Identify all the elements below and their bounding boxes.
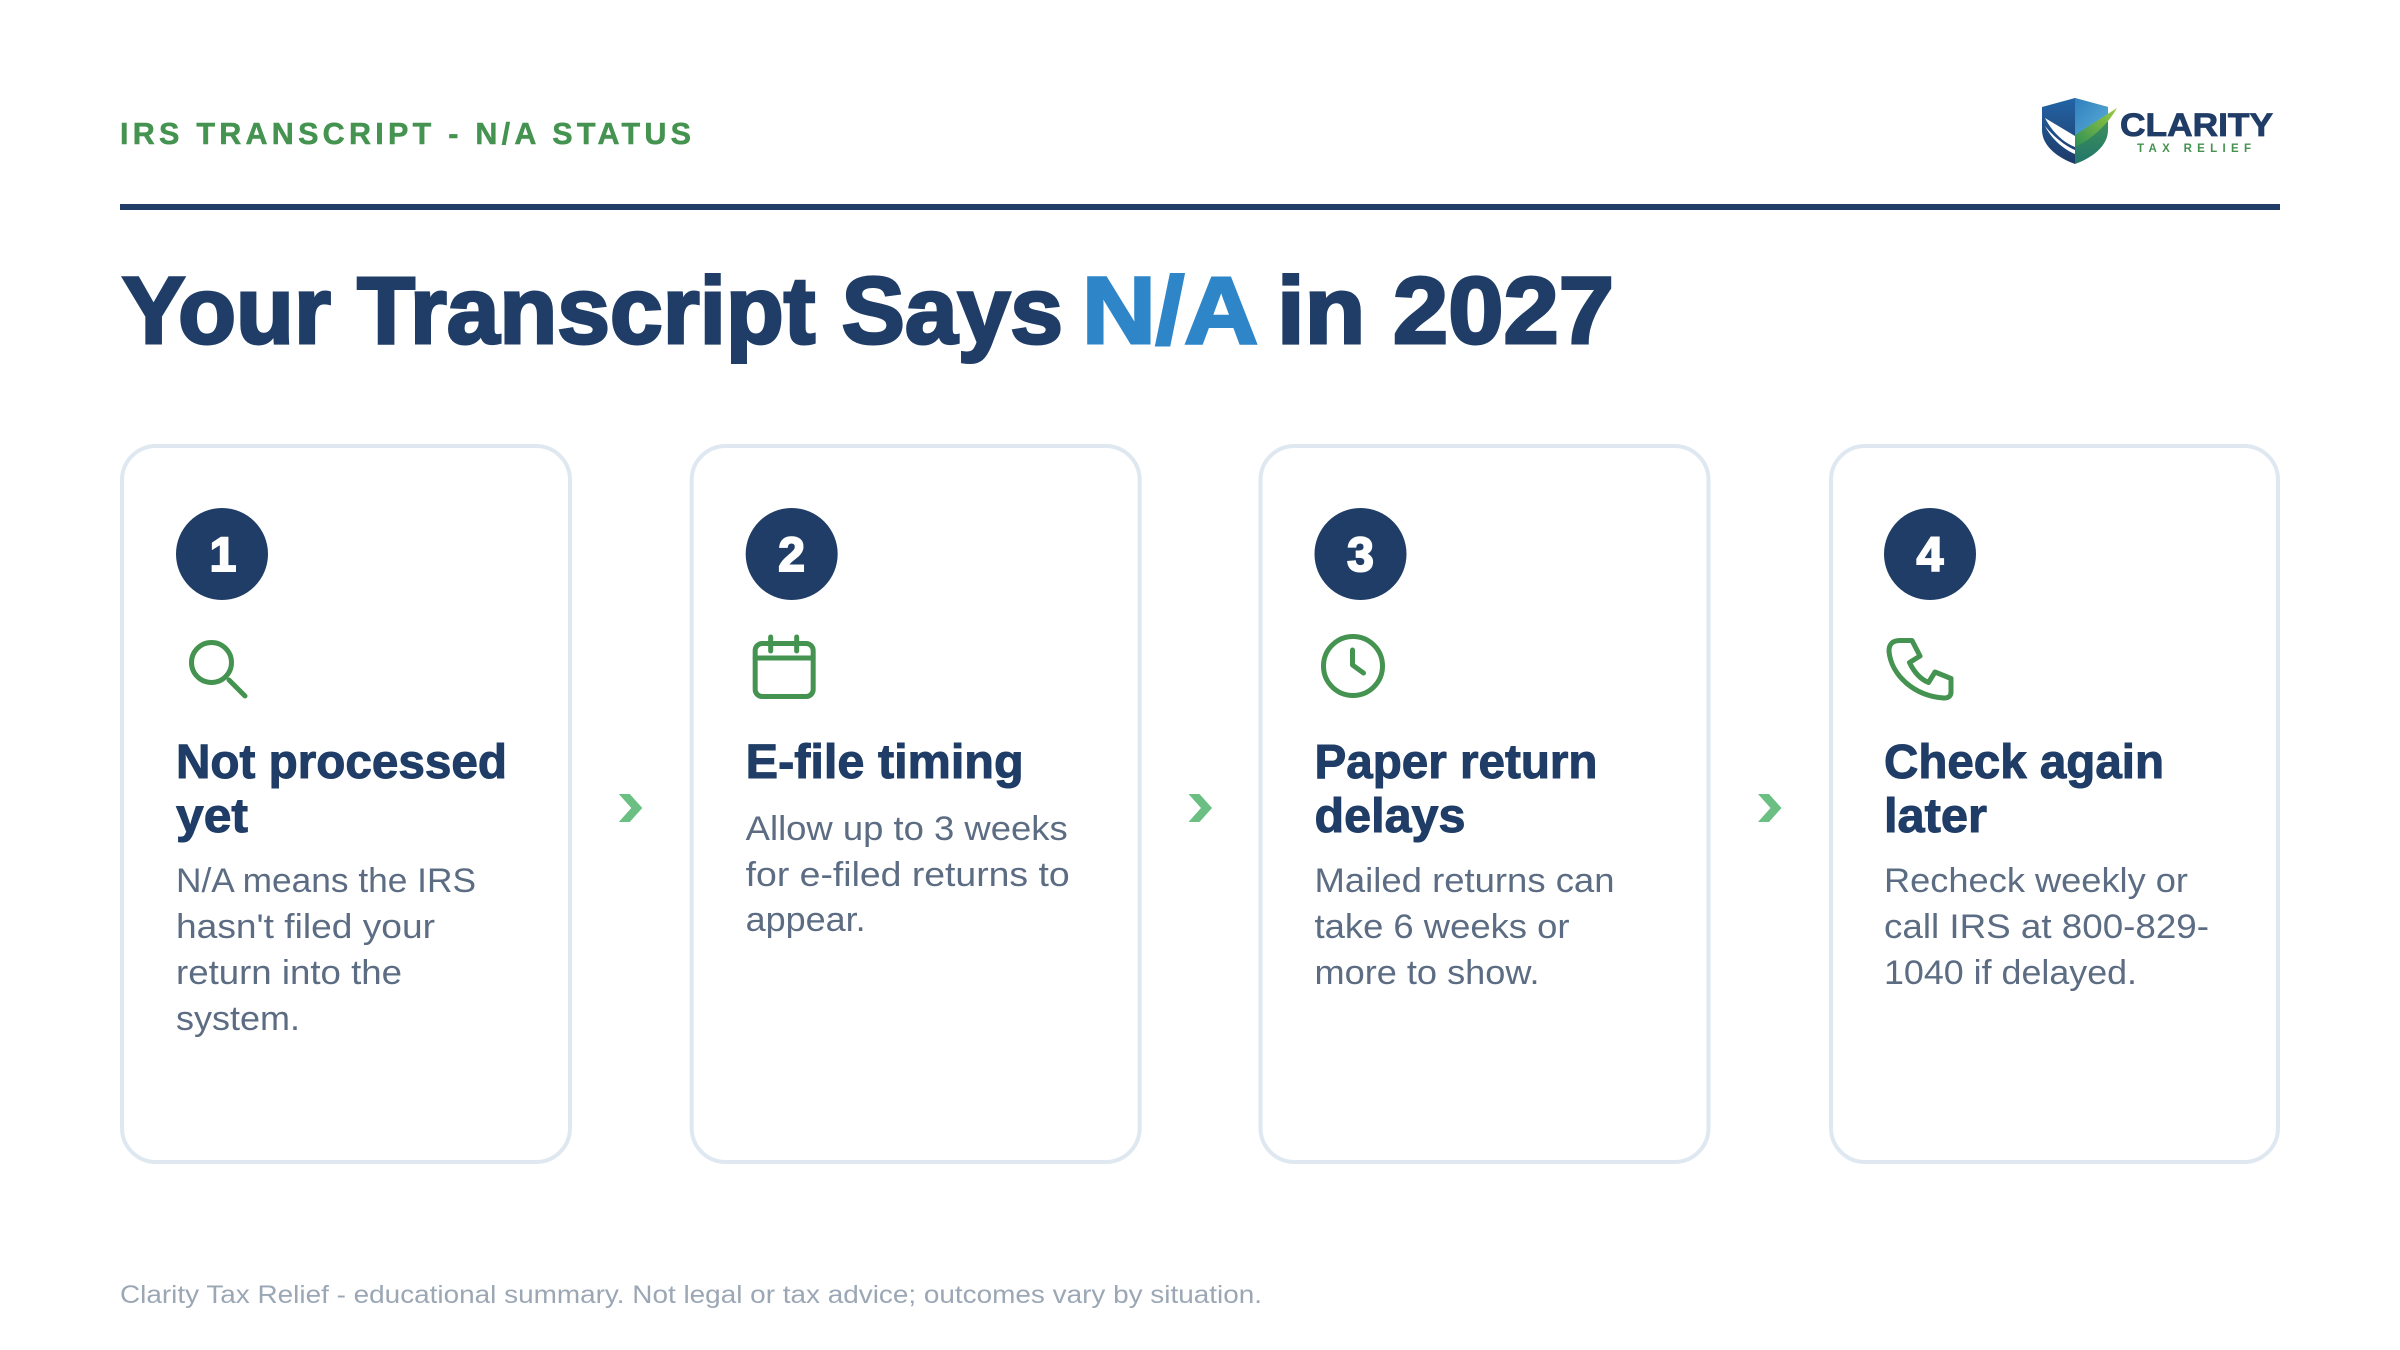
body text: hasn't filed your [176,908,435,946]
body text: 1040 if delayed. [1884,954,2137,992]
number badge 4 [1884,508,1976,600]
heading: Check again [1884,736,2164,789]
panel: step 3 [1260,446,1708,1162]
card outline [1260,446,1708,1162]
logo wordmark: CLARITY [2120,107,2273,143]
number badge 2: 2 [778,529,805,582]
panel: step 1 [122,446,570,1162]
logo tagline: TAX RELIEF [2137,143,2251,155]
icon: clock [1324,636,1382,696]
header rule [120,204,2280,210]
body text: take 6 weeks or [1314,908,1570,946]
body text: appear. [746,901,866,939]
heading: yet [176,790,248,843]
title: N/A [1082,258,1258,364]
body text: for e-filed returns to [746,856,1070,894]
logo shield [2042,98,2117,164]
icon: calendar [755,637,813,696]
panel: step 2 [692,446,1140,1162]
number badge 1 [176,508,268,600]
number badge 4: 4 [1917,529,1944,582]
heading: Not processed [176,736,507,789]
body text: more to show. [1314,954,1540,992]
body text [1314,862,1614,992]
body text: call IRS at 800-829- [1884,908,2209,946]
card outline [692,446,1140,1162]
number badge 2 [746,508,838,600]
heading: later [1884,790,1987,843]
body text [746,810,1070,939]
title: Your Transcript Says [122,258,1063,364]
body text: Mailed returns can [1314,862,1614,900]
body text: Recheck weekly or [1884,862,2188,900]
heading: Paper return [1314,736,1598,789]
logo: Clarity Tax Relief [2042,98,2273,164]
title: in 2027 [1277,258,1614,364]
number badge 1: 1 [210,529,236,582]
number badge 3 [1314,508,1406,600]
card outline [122,446,570,1162]
icon: magnifying glass [192,642,245,696]
footer disclaimer: Clarity Tax Relief - educational summary. Not legal or tax advice; outcomes vary by situation. [120,1281,1262,1309]
body text: return into the [176,954,402,992]
arrow 1 [619,794,642,822]
card outline [1831,446,2278,1162]
panel: step 4 [1831,446,2278,1162]
body text: Allow up to 3 weeks [746,810,1068,848]
heading [1884,736,2164,843]
heading [1314,736,1598,843]
heading: delays [1314,790,1466,843]
heading [176,736,507,843]
number badge 3: 3 [1347,529,1374,582]
body text: N/A means the IRS [176,862,476,900]
arrow 2 [1188,794,1212,822]
body text [1884,862,2209,992]
body text [176,862,476,1038]
heading: E-file timing [746,736,1024,789]
eyebrow label: IRS TRANSCRIPT - N/A STATUS [120,117,691,151]
title [122,258,1614,364]
body text: system. [176,1000,300,1038]
arrow 3 [1758,794,1782,822]
icon: phone [1889,640,1951,698]
